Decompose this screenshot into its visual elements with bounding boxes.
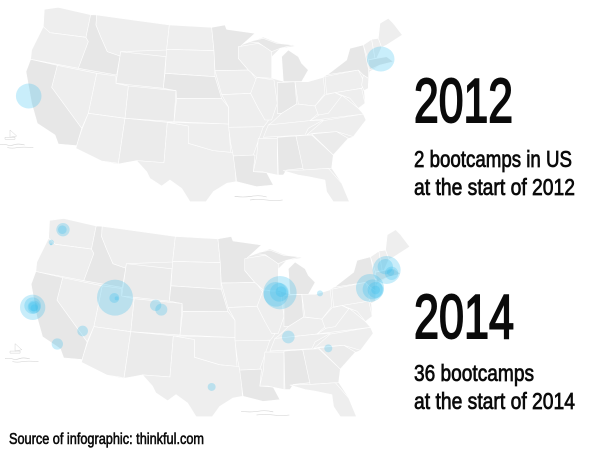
source credit: Source of infographic: thinkful.com	[9, 431, 204, 448]
text: 2014 description	[414, 360, 575, 414]
text: 2014 description: 36 bootcamps	[414, 360, 534, 386]
text: 2012 description: at the start of 2012	[414, 174, 575, 200]
bootcamp bubbles 2014	[20, 223, 401, 391]
text: 2014 description: at the start of 2014	[414, 388, 575, 414]
heading: 2014: 2014	[414, 283, 514, 352]
heading: 2012: 2012	[414, 67, 513, 136]
US states 2014	[5, 218, 410, 417]
text: 2012 description	[414, 146, 575, 200]
bootcamp bubbles 2012	[16, 46, 395, 108]
map: United States 2014	[5, 218, 410, 417]
map: United States 2012	[0, 7, 402, 202]
US states 2012	[0, 7, 402, 202]
